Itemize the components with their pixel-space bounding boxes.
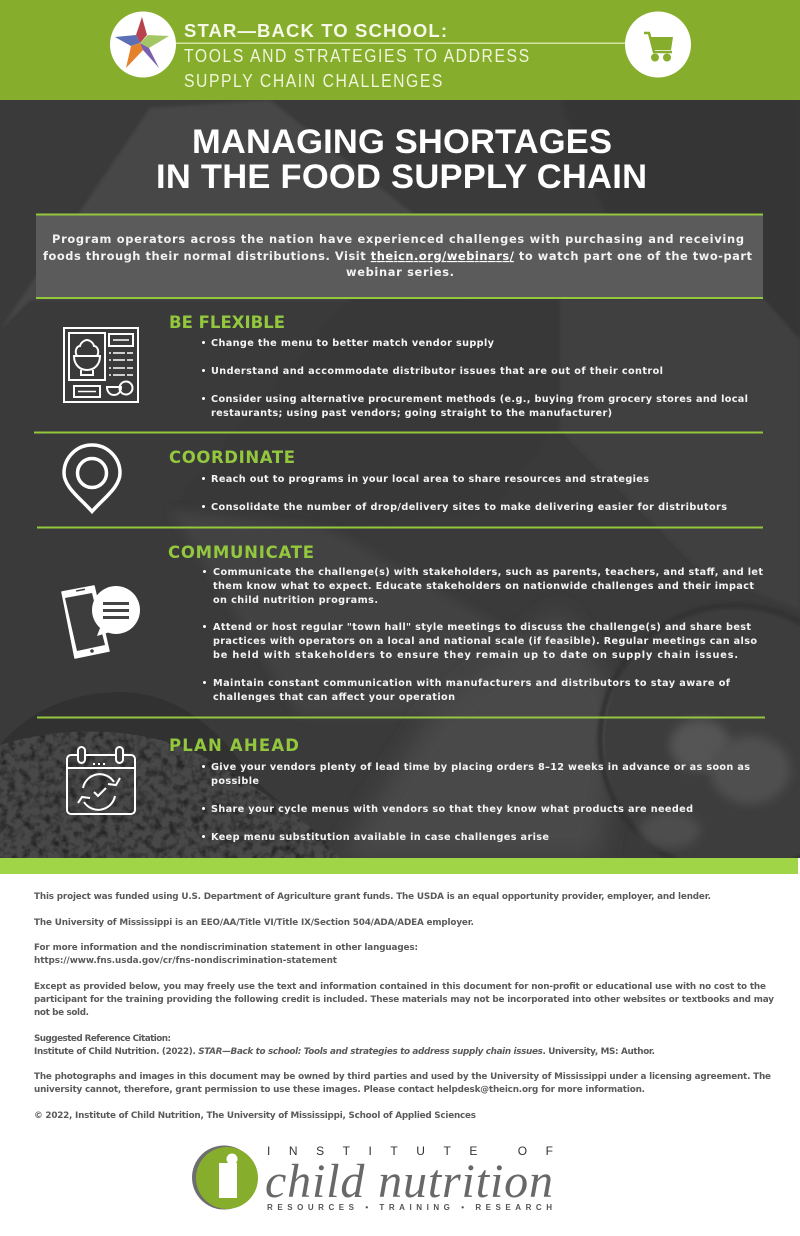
logo: Institute of Child Nutrition: INSTITUTE OF — [267, 1144, 553, 1158]
footer legal text: Suggested Reference Citation: — [34, 1034, 171, 1044]
section: plan ahead — [67, 736, 750, 843]
header title — [184, 20, 529, 91]
bullet list — [202, 338, 748, 419]
heading: COORDINATE — [169, 448, 295, 467]
bullet list: Maintain constant communication with manufacturers and distributors to stay aware of — [213, 678, 731, 689]
intro panel — [36, 214, 763, 299]
footer legal text: The photographs and images in this document may be owned by third parties and used by the University of Mississippi under a licensing agreement. The — [34, 1072, 771, 1082]
bullet list: challenges that can affect your operation — [213, 692, 455, 703]
bullet list: on child nutrition programs. — [213, 595, 378, 606]
bullet list: Share your cycle menus with vendors so that they know what products are needed — [211, 804, 693, 815]
bullet list: be held with stakeholders to ensure they remain up to date on supply chain issues. — [213, 650, 738, 661]
green footer bar — [0, 858, 798, 874]
logo: Institute of Child Nutrition — [192, 1144, 553, 1212]
heading: COMMUNICATE — [168, 543, 314, 562]
section: communicate — [62, 543, 763, 703]
star logo badge — [110, 12, 176, 78]
header title: TOOLS AND STRATEGIES TO ADDRESS — [184, 45, 529, 66]
intro panel: foods through their normal distributions. Visit theicn.org/webinars/ to watch part one of the two-part — [43, 249, 753, 263]
section: coordinate — [64, 445, 727, 513]
intro panel: webinar series. — [346, 265, 454, 279]
main title: MANAGING SHORTAGES — [192, 123, 612, 161]
bullet list: Give your vendors plenty of lead time by placing orders 8–12 weeks in advance or as soon as — [211, 762, 750, 773]
footer legal text: https://www.fns.usda.gov/cr/fns-nondiscrimination-statement — [34, 956, 337, 966]
heading: PLAN AHEAD — [169, 736, 299, 755]
intro panel: Program operators across the nation have experienced challenges with purchasing and receiving — [52, 232, 744, 246]
header title: SUPPLY CHAIN CHALLENGES — [184, 70, 442, 91]
bullet list: Reach out to programs in your local area to share resources and strategies — [211, 474, 649, 485]
heading: BE FLEXIBLE — [169, 313, 285, 332]
bullet list: them know what to expect. Educate stakeholders on nationwide challenges and their impact — [213, 581, 754, 592]
header banner — [0, 0, 800, 100]
footer legal text: The University of Mississippi is an EEO/AA/Title VI/Title IX/Section 504/ADA/ADEA employer. — [34, 918, 474, 928]
footer legal text: university cannot, therefore, grant permission to use these images. Please contact helpdesk@theicn.org for more information. — [34, 1085, 645, 1095]
main title — [156, 123, 647, 196]
bullet list — [202, 762, 750, 843]
section: be flexible — [64, 313, 748, 419]
bullet list: restaurants; using past vendors; going straight to the manufacturer) — [211, 408, 612, 419]
bullet list — [203, 567, 763, 703]
bullet list: Understand and accommodate distributor issues that are out of their control — [211, 366, 663, 377]
icon: phone with speech bubble — [62, 586, 140, 658]
footer legal text: Except as provided below, you may freely use the text and information contained in this document for non-profit or educational use with no cost to the — [34, 982, 766, 992]
footer legal text: participant for the training providing the following credit is included. These materials may not be incorporated into other websites or textbooks and may — [34, 995, 774, 1005]
background photo panel — [0, 100, 800, 875]
footer legal text: This project was funded using U.S. Department of Agriculture grant funds. The USDA is an equal opportunity provider, employer, and lender. — [34, 892, 711, 902]
footer legal text: © 2022, Institute of Child Nutrition, The University of Mississippi, School of Applied Sciences — [34, 1111, 476, 1121]
bullet list: practices with operators on a local and national scale (if feasible). Regular meetings can also — [213, 636, 757, 647]
bullet list — [202, 474, 727, 513]
footer legal text: For more information and the nondiscrimination statement in other languages: — [34, 943, 418, 953]
bullet list: Keep menu substitution available in case challenges arise — [211, 832, 549, 843]
icon: menu with food bowl — [64, 328, 138, 402]
icon: shopping cart — [625, 12, 691, 78]
bullet list: Communicate the challenge(s) with stakeholders, such as parents, teachers, and staff, and let — [213, 567, 763, 578]
icon: location pin — [64, 445, 120, 512]
bullet list: Consider using alternative procurement methods (e.g., buying from grocery stores and local — [211, 394, 748, 405]
bullet list: Attend or host regular "town hall" style meetings to discuss the challenge(s) and share best — [213, 622, 751, 633]
footer legal text — [34, 892, 774, 1121]
bullet list: Consolidate the number of drop/delivery sites to make delivering easier for distributors — [211, 502, 727, 513]
logo: Institute of Child Nutrition: child nutrition — [265, 1155, 553, 1208]
header title: STAR—BACK TO SCHOOL: — [184, 20, 447, 41]
footer legal text: Institute of Child Nutrition. (2022). STAR—Back to school: Tools and strategies to address supply chain issues. University, MS: Author. — [34, 1047, 655, 1057]
main title: IN THE FOOD SUPPLY CHAIN — [156, 158, 647, 196]
icon: calendar with cycle arrows — [67, 747, 135, 814]
bullet list: possible — [211, 776, 259, 787]
footer legal text: not be sold. — [34, 1008, 89, 1018]
bullet list: Change the menu to better match vendor supply — [211, 338, 495, 349]
logo: Institute of Child Nutrition: RESOURCES • TRAINING • RESEARCH — [267, 1203, 552, 1212]
